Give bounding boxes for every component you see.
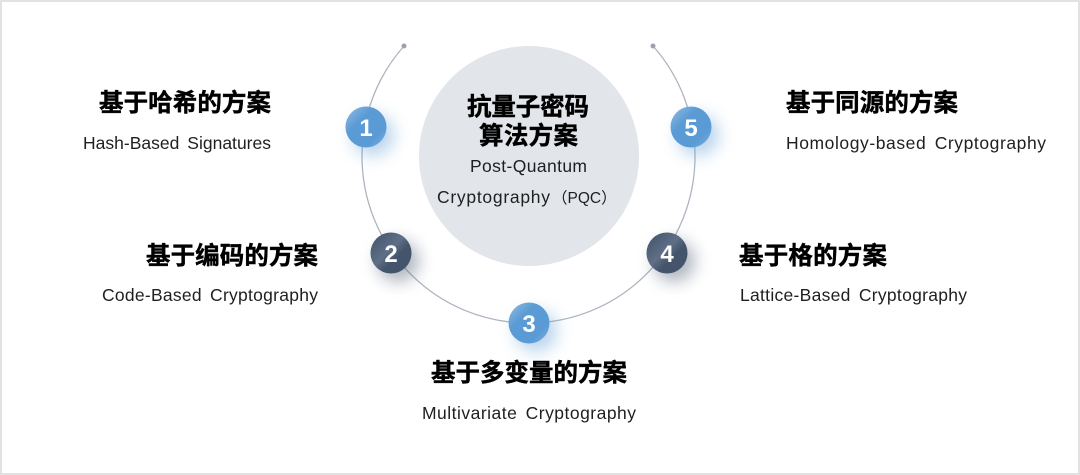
node 3: 3 <box>522 311 536 338</box>
label 2: code-based <box>102 241 318 305</box>
label 3: multivariate: 基于多变量的方案 <box>431 358 628 387</box>
label 5: homology-based: 基于同源的方案 <box>786 88 958 117</box>
node 2 <box>370 232 419 282</box>
label 4: lattice-based: Lattice-Based Cryptography <box>740 285 967 305</box>
label 5: homology-based: Homology-based Cryptography <box>786 133 1046 153</box>
center circle <box>419 46 639 266</box>
label 3: multivariate: Multivariate Cryptography <box>422 403 636 423</box>
node 5 <box>670 106 719 156</box>
node 1: 1 <box>359 115 373 142</box>
center title <box>467 92 589 150</box>
center title: 抗量子密码 <box>467 92 589 121</box>
center subtitle: （PQC） <box>552 190 617 207</box>
label 4: lattice-based <box>739 241 967 305</box>
label 1: hash-based: Hash-Based Signatures <box>83 133 271 153</box>
label 3: multivariate <box>422 358 636 423</box>
label 1: hash-based: 基于哈希的方案 <box>99 88 272 117</box>
node 3 <box>508 302 557 352</box>
node 4 <box>646 232 695 282</box>
node 1 <box>346 106 394 156</box>
node 5: 5 <box>684 115 698 142</box>
label 4: lattice-based: 基于格的方案 <box>739 241 888 270</box>
label 5: homology-based <box>786 88 1046 153</box>
center subtitle: Post-Quantum <box>470 156 587 176</box>
label 1: hash-based <box>83 88 272 153</box>
center subtitle: Cryptography <box>437 187 550 207</box>
center title: 算法方案 <box>479 121 578 150</box>
node 4: 4 <box>660 241 674 268</box>
node 2: 2 <box>384 241 398 268</box>
ring arc <box>362 44 695 323</box>
label 2: code-based: Code-Based Cryptography <box>102 285 318 305</box>
label 2: code-based: 基于编码的方案 <box>146 241 318 270</box>
center subtitle <box>437 156 617 207</box>
